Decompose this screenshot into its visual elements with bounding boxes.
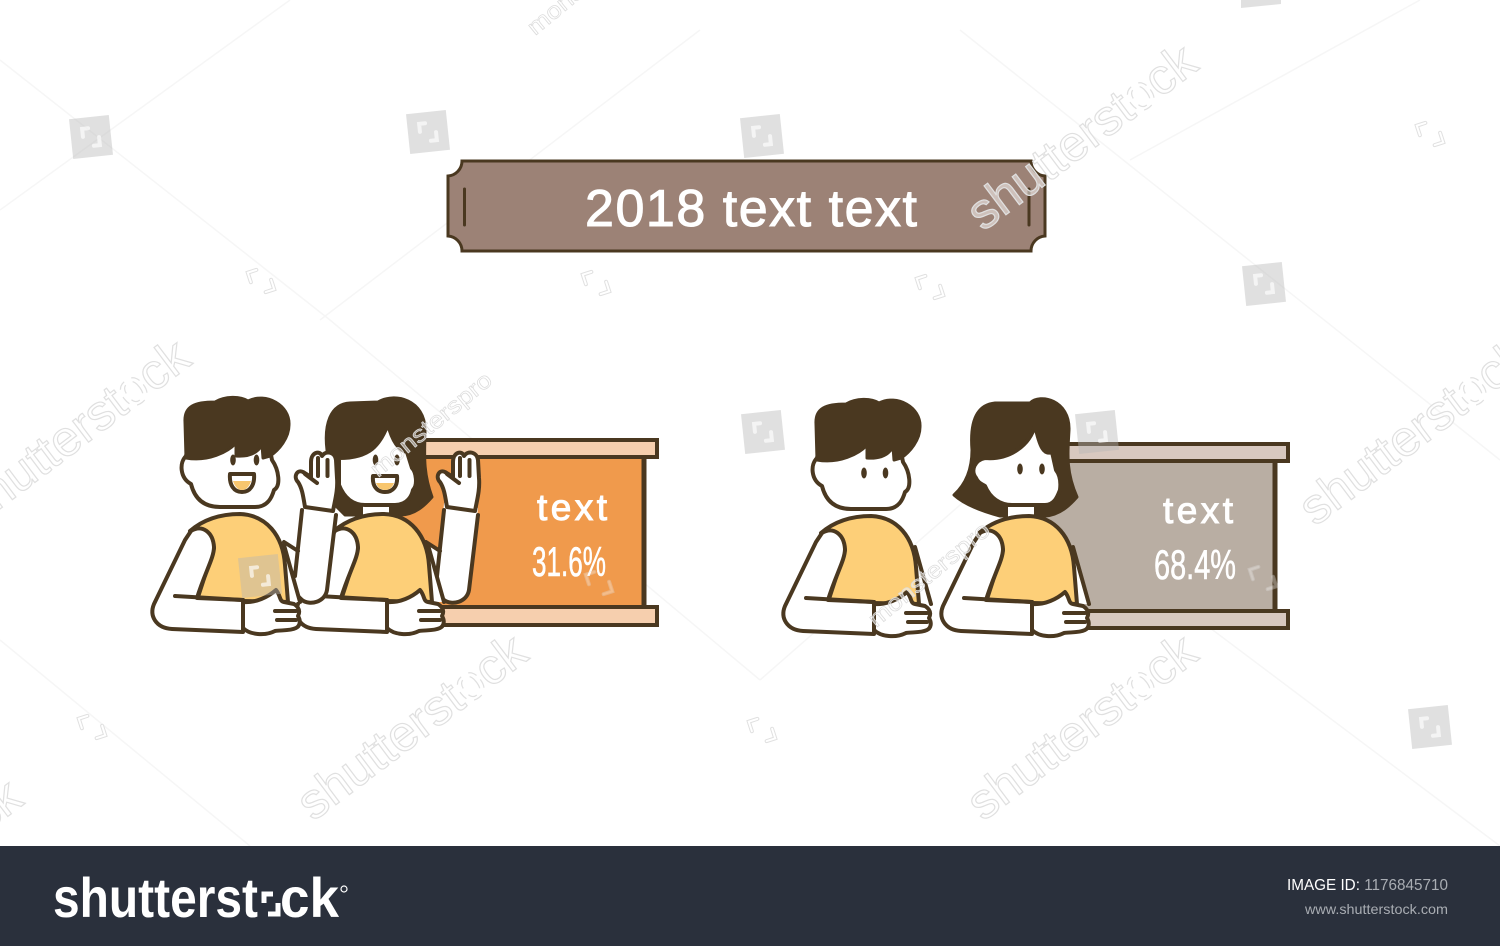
stock watermarks: shutterstock (956, 32, 1208, 241)
banner (448, 161, 1045, 251)
stock watermarks: shutterstock (286, 622, 538, 831)
man neutral (783, 399, 931, 636)
stock watermarks: shutterstock (956, 622, 1208, 831)
board value: 31.6% (532, 538, 606, 585)
footer logo: ck (280, 866, 340, 929)
image id: IMAGE ID: 1176845710 (1287, 877, 1448, 894)
board value: 68.4% (1154, 541, 1236, 588)
banner title: 2018 text text (585, 180, 918, 238)
board label: text (1163, 490, 1234, 531)
footer bar (0, 846, 1500, 946)
stock watermarks: monsterspro (863, 516, 995, 632)
man speaking (152, 397, 337, 634)
board: orange 31.6% (400, 440, 657, 625)
board: grey 68.4% (1040, 444, 1288, 628)
woman speaking (296, 398, 479, 634)
footer logo: shutterst (53, 866, 258, 929)
stock watermarks: monsterspro (365, 366, 497, 482)
website: www.shutterstock.com (1304, 901, 1448, 917)
board label: text (537, 487, 608, 528)
woman neutral (941, 399, 1089, 636)
watermark square badges (69, 0, 1452, 749)
